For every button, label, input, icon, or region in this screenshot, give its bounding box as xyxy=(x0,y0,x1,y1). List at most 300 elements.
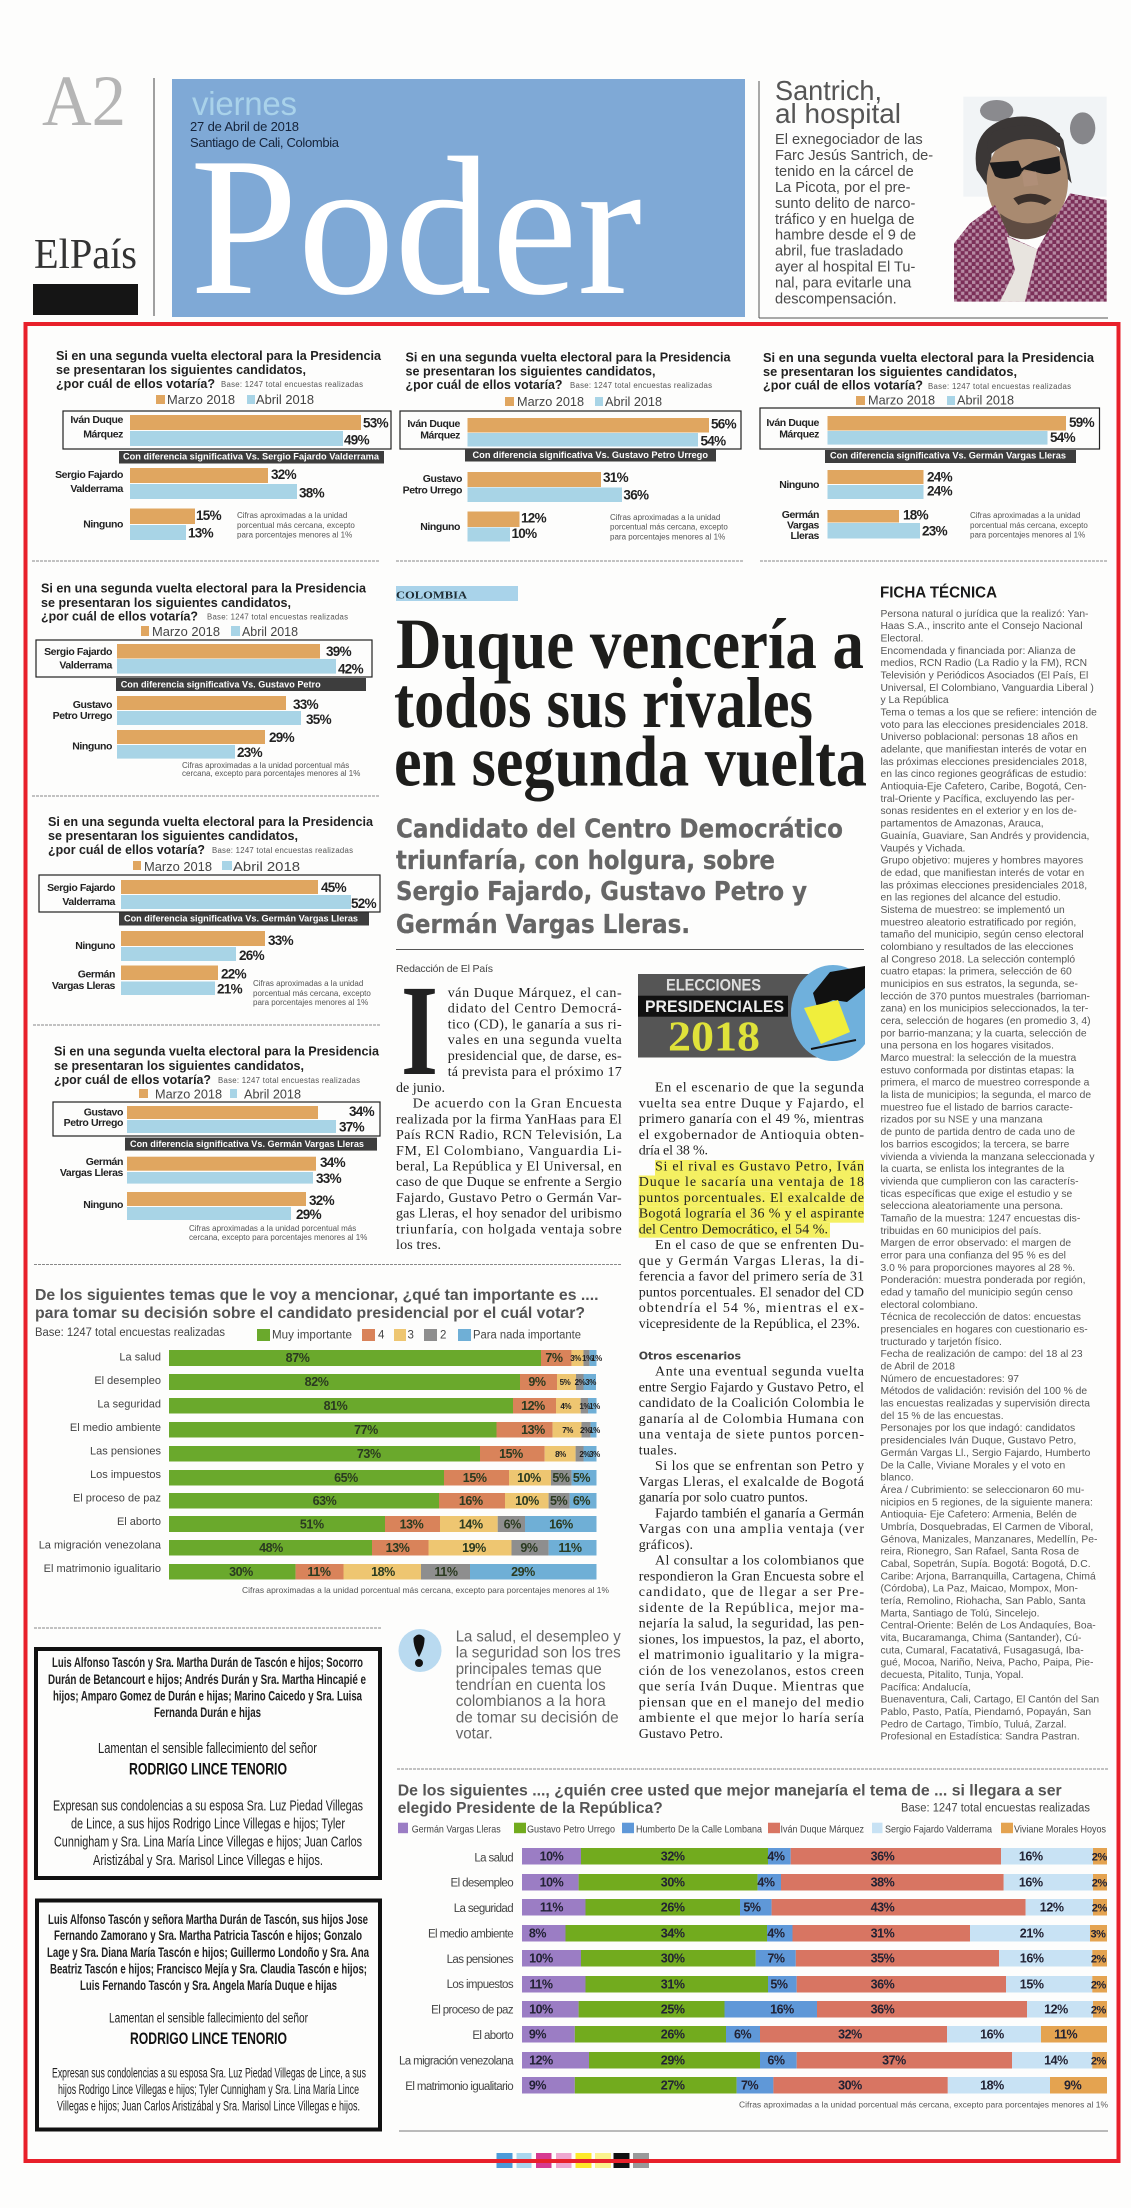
row: El aborto: 6% xyxy=(734,2028,752,2042)
sheet text: cuta, Cumaral, Facatativá, Fusagasugá, Iba- xyxy=(880,1645,1084,1656)
row: El medio ambiente xyxy=(428,1925,1107,1942)
sheet text: al Congreso 2018. La selección contempló xyxy=(880,954,1075,965)
chart title: Si en una segunda vuelta electoral para la Presidencia xyxy=(54,1044,380,1059)
sheet text: del 15 % de las encuestas. xyxy=(880,1411,1004,1422)
sheet text: Margen de error observado: el margen de xyxy=(880,1238,1071,1249)
bars: Ninguno: Ninguno xyxy=(83,1199,123,1211)
bars: Gustavo Petro Urrego: 37% xyxy=(339,1120,365,1135)
chart title: para tomar su decisión sobre el candidato presidencial por el cuál votar? xyxy=(35,1305,585,1322)
article column 2: el matrimonio igualitario y la migra- xyxy=(639,1648,864,1663)
bars: Ninguno: 24% xyxy=(927,469,953,484)
callout text: principales temas que xyxy=(456,1661,602,1678)
article column 2: Si el rival es Gustavo Petro, Iván xyxy=(655,1159,864,1174)
legend xyxy=(139,1087,301,1102)
notice condolences: de Lince, a sus hijos Rodrigo Lince Villegas e hijos; Tyler xyxy=(71,1817,345,1833)
row: Los impuestos: 15% xyxy=(1020,1978,1044,1992)
article text: beral, La República y El Universal, en xyxy=(396,1160,622,1174)
notice line: Lamentan el sensible fallecimiento del señor xyxy=(98,1741,317,1757)
bars: Ninguno: 23% xyxy=(237,745,263,760)
row: El desempleo: 5% xyxy=(560,1378,571,1387)
row: La seguridad: 1% xyxy=(579,1402,590,1411)
graphic label: ELECCIONES xyxy=(666,976,761,995)
row: El desempleo: 30% xyxy=(661,1876,685,1890)
row: El medio ambiente: 1% xyxy=(589,1426,600,1435)
legend: Abril 2018 xyxy=(242,624,298,639)
row: El matrimonio igualitario: El matrimonio igualitario xyxy=(405,2081,513,2093)
bars: Iván Duque Márquez: 56% xyxy=(711,416,737,432)
row: El matrimonio igualitario: El matrimonio igualitario xyxy=(44,1563,161,1575)
row: Las pensiones: 30% xyxy=(661,1952,685,1966)
legend: Abril 2018 xyxy=(256,392,314,407)
row: El proceso de paz: 5% xyxy=(550,1494,568,1508)
bars: Ninguno xyxy=(72,730,295,760)
chart title: se presentaran los siguientes candidatos, xyxy=(41,595,291,610)
article column 2: Si los que se enfrentan son Petro y xyxy=(655,1459,864,1474)
legend xyxy=(398,1823,1106,1836)
legend: Sergio Fajardo Valderrama xyxy=(885,1824,992,1836)
footnote: cercana, excepto para porcentajes menores al 1% xyxy=(189,1233,367,1242)
legend xyxy=(156,392,314,407)
row: El aborto: 6% xyxy=(504,1518,521,1532)
sheet text: Tamaño de la muestra: 1247 encuestas dis- xyxy=(880,1213,1080,1224)
base note: Base: 1247 total encuestas realizadas xyxy=(570,381,712,390)
article column 2: que y Germán Vargas Lleras, la di- xyxy=(639,1254,864,1269)
bars: Iván Duque Márquez: 59% xyxy=(1069,415,1095,430)
row: El aborto: 16% xyxy=(549,1518,573,1532)
row: El aborto: 13% xyxy=(400,1518,424,1532)
bars: Sergio Fajardo Valderrama: Sergio Fajardo xyxy=(47,882,115,894)
article text: vales en una segunda vuelta xyxy=(448,1033,622,1048)
brief text: La Picota, por el pre- xyxy=(775,180,911,196)
sheet text: las próximas elecciones presidenciales 2018, xyxy=(880,880,1087,891)
callout text: colombianos a la hora xyxy=(456,1693,606,1710)
row: El medio ambiente: 31% xyxy=(871,1926,895,1940)
bars: Ninguno: 24% xyxy=(927,484,953,499)
row: Las pensiones: 2% xyxy=(579,1450,590,1459)
article text: De acuerdo con la Gran Encuesta xyxy=(413,1097,622,1112)
legend: Marzo 2018 xyxy=(517,394,584,409)
bars: Sergio Fajardo Valderrama xyxy=(44,644,364,677)
sheet text: partamentos de Amazonas, Arauca, xyxy=(880,819,1044,830)
row: El matrimonio igualitario xyxy=(405,2077,1107,2094)
sheet text: adelante, que manifiestan interés de votar en xyxy=(880,745,1087,756)
article column 2: sidente de la República, mejor ma- xyxy=(639,1601,864,1616)
sheet text: Pedro de Cartago, Timbío, Tuluá, Zarzal. xyxy=(880,1719,1067,1730)
row: La migración venezolana: 12% xyxy=(529,2054,553,2068)
sheet text: (Córdoba), La Paz, Maicao, Mompox, Mon- xyxy=(880,1584,1078,1595)
bars: Iván Duque Márquez xyxy=(766,415,1095,445)
banner date: 27 de Abril de 2018 xyxy=(190,119,299,134)
banner place: Santiago de Cali, Colombia xyxy=(190,135,340,150)
legend: Gustavo Petro Urrego xyxy=(527,1824,615,1836)
legend: Marzo 2018 xyxy=(152,624,220,639)
bars: Iván Duque Márquez xyxy=(70,414,389,448)
article column 2: ganaría por solo cuatro puntos. xyxy=(639,1491,808,1506)
sheet text: los barrios escogidos; la tercera, se barre xyxy=(880,1139,1070,1150)
headline: en segunda vuelta xyxy=(394,722,867,802)
sheet text: muestreo aleatorio estratificado por región, xyxy=(880,917,1076,928)
sheet text: blanco. xyxy=(880,1473,914,1484)
headline: todos sus rivales xyxy=(394,663,813,743)
legend: Viviane Morales Hoyos xyxy=(1014,1824,1106,1836)
row: La salud: 3% xyxy=(570,1354,581,1363)
sheet text: municipios en sus estratos, la segunda, se- xyxy=(880,979,1078,990)
chart title: elegido Presidente de la República? xyxy=(398,1800,663,1817)
legend: 2 xyxy=(440,1330,446,1342)
row: Los impuestos: 65% xyxy=(334,1471,358,1485)
article column 2: Otros escenarios xyxy=(639,1350,741,1362)
bars: Gustavo Petro Urrego: Gustavo xyxy=(84,1106,123,1118)
brief text: tenido en la cárcel de xyxy=(775,164,914,180)
bars: Sergio Fajardo Valderrama: 45% xyxy=(321,880,347,895)
section tag: COLOMBIA: COLOMBIA xyxy=(396,590,467,602)
row: La migración venezolana: 14% xyxy=(1044,2054,1068,2068)
row: El matrimonio igualitario: 27% xyxy=(661,2078,685,2092)
row: Los impuestos: 5% xyxy=(573,1471,590,1485)
base note: Base: 1247 total encuestas realizadas xyxy=(901,1803,1090,1815)
bars: Ninguno xyxy=(779,469,953,499)
sheet text: Umbría, Dosquebradas, El Carmen de Viboral, xyxy=(880,1522,1093,1533)
row: La migración venezolana: 19% xyxy=(462,1541,486,1555)
bars: Gustavo Petro Urrego xyxy=(403,470,649,503)
row: Los impuestos: 36% xyxy=(871,1978,895,1992)
sheet text: tructurado y tarjetón físico. xyxy=(880,1337,1002,1348)
row: Las pensiones: 35% xyxy=(871,1952,895,1966)
row: La seguridad: 5% xyxy=(743,1900,761,1914)
row: El desempleo: El desempleo xyxy=(451,1878,513,1890)
row: La seguridad: 26% xyxy=(661,1900,685,1914)
row: El aborto xyxy=(117,1516,596,1532)
bars: Ninguno: 33% xyxy=(268,933,294,948)
sheet text: Área / Cubrimiento: se seleccionaron 60 mu- xyxy=(880,1483,1084,1496)
row: El proceso de paz: 16% xyxy=(459,1494,483,1508)
footnote: Cifras aproximadas a la unidad xyxy=(253,979,363,988)
bars: Gustavo Petro Urrego: 35% xyxy=(306,712,332,727)
chart title: ¿por cuál de ellos votaría? xyxy=(406,377,563,392)
sheet text: De la Calle, Viviane Morales y el voto en xyxy=(880,1460,1065,1471)
bars: Gustavo Petro Urrego: Petro Urrego xyxy=(403,484,462,496)
legend: Muy importante xyxy=(272,1330,352,1342)
row: Las pensiones xyxy=(90,1446,600,1462)
bars: Germán Vargas Lleras xyxy=(60,1155,346,1186)
sheet text: Antioquia-Eje Cafetero, Caribe, Bogotá, Cen- xyxy=(880,782,1087,793)
brief heading: Santrich, xyxy=(775,75,882,106)
bars: Ninguno: 29% xyxy=(296,1207,322,1222)
black block xyxy=(33,284,138,315)
row: El medio ambiente: 8% xyxy=(529,1926,546,1940)
row: La seguridad: 1% xyxy=(589,1402,600,1411)
technical sheet: Ficha Técnica xyxy=(880,582,1099,1743)
panel: poll Petro vs Vargas Lleras xyxy=(53,1044,380,1242)
row: La migración venezolana: La migración venezolana xyxy=(39,1540,162,1552)
row: La salud xyxy=(119,1350,602,1366)
notice condolences: hijos Rodrigo Lince Villegas e hijos; Tyler Cunnigham y Sra. Lina María Lince xyxy=(58,2082,359,2097)
bars: Iván Duque Márquez: Márquez xyxy=(779,428,819,440)
row: Las pensiones: 2% xyxy=(1091,1954,1107,1966)
sheet text: tral-Oriente y Pacífica, excluyendo las per- xyxy=(880,794,1075,805)
bars: Germán Vargas Lleras: Germán xyxy=(86,1156,123,1168)
bars: Ninguno xyxy=(75,931,294,963)
footnote: para porcentajes menores al 1% xyxy=(610,532,725,541)
legend: 4 xyxy=(378,1330,385,1342)
row: Los impuestos: 2% xyxy=(1091,1980,1107,1992)
base note: Base: 1247 total encuestas realizadas xyxy=(218,1076,360,1085)
article column 2: piensan que en el manejo del medio xyxy=(639,1696,864,1710)
row: Las pensiones xyxy=(447,1950,1107,1966)
footnote: para porcentajes menores al 1% xyxy=(970,530,1085,540)
article column 2: Duque le sacaría una ventaja de 18 xyxy=(639,1175,864,1190)
row: El proceso de paz: 12% xyxy=(1044,2002,1068,2016)
legend xyxy=(257,1329,581,1342)
row: Las pensiones: 16% xyxy=(1020,1952,1044,1966)
article column 2: ganaría al de Colombia Humana con xyxy=(639,1412,864,1427)
sheet text: tería, Remolino, Riohacha, San Pablo, Santa xyxy=(880,1596,1086,1607)
footnote: porcentual más cercana, excepto xyxy=(610,523,728,532)
bars: Ninguno: 12% xyxy=(521,510,547,526)
row: El desempleo xyxy=(94,1374,596,1390)
base note: Base: 1247 total encuestas realizadas xyxy=(928,382,1071,391)
chart title: se presentaran los siguientes candidatos, xyxy=(56,362,306,377)
notice names: Fernando Zamorano y Sra. Martha Patricia Tascón e hijos; Gonzalo xyxy=(54,1927,362,1943)
article column 2: En el escenario de que la segunda xyxy=(655,1081,865,1096)
notice names: Fernanda Durán e hijas xyxy=(154,1704,261,1720)
headline: Duque vencería a xyxy=(396,604,864,684)
bars: Germán Vargas Lleras: 21% xyxy=(217,982,243,997)
article text: didato del Centro Democrá- xyxy=(448,1002,622,1017)
bars: Sergio Fajardo Valderrama xyxy=(47,880,377,911)
sheet text: Ponderación: muestra ponderada por región, xyxy=(880,1275,1085,1286)
row: Los impuestos: 31% xyxy=(661,1978,685,1992)
chart title: ¿por cuál de ellos votaría? xyxy=(41,609,198,624)
row: El desempleo: 2% xyxy=(1092,1878,1107,1890)
article column 2: que sería Iván Duque. Mientras que xyxy=(639,1680,864,1695)
row: La salud: La salud xyxy=(119,1352,161,1364)
article column 2: primero ganaría con el 49 %, mientras xyxy=(639,1112,864,1127)
sheet heading: FICHA TÉCNICA xyxy=(880,582,997,602)
row: Las pensiones: 7% xyxy=(767,1952,785,1966)
sheet text: la cuarta, se enlista los integrantes de la xyxy=(880,1164,1065,1175)
sheet text: Universo poblacional: personas 18 años en xyxy=(880,732,1078,743)
sheet text: Cabal, Sopetrán, Supía. Bogotá: Bogotá, D.C. xyxy=(880,1559,1091,1570)
row: El medio ambiente xyxy=(70,1422,600,1438)
page number A2: A2 xyxy=(42,61,126,141)
legend: Iván Duque Márquez xyxy=(780,1824,864,1836)
chart title: se presentaran los siguientes candidatos, xyxy=(54,1058,304,1073)
row: Los impuestos: Los impuestos xyxy=(90,1469,161,1481)
row: El proceso de paz xyxy=(73,1493,596,1508)
row: La migración venezolana: 9% xyxy=(520,1541,538,1555)
row: La seguridad: La seguridad xyxy=(454,1903,513,1915)
sheet text: Vaupés y Vichada. xyxy=(880,843,965,854)
article text: de junio. xyxy=(396,1081,445,1096)
article column 2: En el caso de que se enfrenten Du- xyxy=(655,1238,864,1253)
legend: Abril 2018 xyxy=(233,859,300,874)
footnote: Cifras aproximadas a la unidad xyxy=(970,511,1080,520)
callout text: tendrían en cuenta los xyxy=(456,1677,606,1694)
row: El matrimonio igualitario: 18% xyxy=(371,1565,395,1579)
significance strip: Con diferencia significativa Vs. Sergio Fajardo Valderrama xyxy=(123,452,380,462)
notice names: Beatriz Tascón e hijos; Francisco Mejía y Sra. Claudia Tascón e hijos; xyxy=(50,1960,367,1976)
row: La migración venezolana: 29% xyxy=(661,2054,685,2068)
notice names: hijos; Amparo Gomez de Durán e hijas; Marino Caicedo y Sra. Luisa xyxy=(53,1687,362,1703)
row: Las pensiones: 15% xyxy=(499,1447,523,1461)
sheet text: rizados por su NSE y una manzana xyxy=(880,1115,1043,1126)
sheet text: las encuestas realizadas y supervisión directa xyxy=(880,1399,1090,1410)
row: El medio ambiente: 21% xyxy=(1020,1926,1044,1940)
bars: Ninguno xyxy=(83,1192,335,1222)
bars: Iván Duque Márquez: Márquez xyxy=(420,430,460,442)
legend: Marzo 2018 xyxy=(155,1087,222,1102)
sheet text: selecciona aleatoriamente una persona. xyxy=(880,1201,1063,1212)
bars: Ninguno: Ninguno xyxy=(72,740,112,752)
footnote: Cifras aproximadas a la unidad porcentual más xyxy=(189,1224,356,1233)
significance strip: Con diferencia significativa Vs. Germán Vargas Lleras xyxy=(830,450,1066,462)
section banner: Poder xyxy=(172,79,745,336)
row: La seguridad: 2% xyxy=(1092,1902,1107,1914)
row: El aborto: 9% xyxy=(529,2028,546,2042)
article column 2: Ante una eventual segunda vuelta xyxy=(655,1364,865,1380)
sheet text: reira, Rionegro, San Rafael, Santa Rosa de xyxy=(880,1547,1079,1558)
sheet text: Televisión y Periódicos Asociados (El País, El xyxy=(880,670,1088,682)
base note: Base: 1247 total encuestas realizadas xyxy=(212,846,353,855)
row: El proceso de paz xyxy=(431,2001,1107,2018)
row: El desempleo: 16% xyxy=(1019,1876,1043,1890)
row: La seguridad xyxy=(454,1899,1107,1916)
sheet text: cuatro etapas: la primera, selección de 60 xyxy=(880,967,1072,978)
sheet text: Marco muestral: la selección de la muestra xyxy=(880,1053,1076,1064)
panel: poll Fajardo vs Petro xyxy=(36,580,372,778)
bars: Gustavo Petro Urrego: 31% xyxy=(603,470,629,485)
notice condolences: Cunnigham y Sra. Lina María Lince Villegas e hijos; Juan Carlos xyxy=(54,1834,362,1850)
sheet text: Antioquia- Eje Cafetero: Armenia, Belén de xyxy=(880,1510,1077,1521)
row: La seguridad xyxy=(97,1398,600,1414)
legend: 3 xyxy=(408,1330,414,1342)
row: El proceso de paz: El proceso de paz xyxy=(431,2005,514,2017)
row: La migración venezolana: 37% xyxy=(882,2054,906,2068)
sheet text: en las cinco regiones geográficas de estudio: xyxy=(880,769,1087,780)
base note: Base: 1247 total encuestas realizadas xyxy=(207,612,348,621)
sheet text: gué, Mocoa, Nariño, Neiva, Pacho, Paipa, Pie- xyxy=(880,1658,1093,1669)
notice deceased name: RODRIGO LINCE TENORIO xyxy=(130,2029,287,2048)
article text: realizada por la firma YanHaas para El xyxy=(396,1112,622,1127)
sheet text: 3.0 % para proporciones mayores al 28 %. xyxy=(880,1263,1075,1274)
row: El desempleo: 38% xyxy=(871,1876,895,1890)
sheet text: sonas residentes en el exterior y en los de- xyxy=(880,806,1077,817)
bars: Ninguno: Ninguno xyxy=(420,521,460,533)
logo El País: ElPaís xyxy=(34,232,137,278)
sheet text: de edad, que manifiestan interés de votar en xyxy=(880,868,1085,879)
row: Las pensiones: 8% xyxy=(555,1450,566,1459)
brief text: El exnegociador de las xyxy=(775,132,923,148)
sheet text: Tema o temas a los que se refiere: intención de xyxy=(880,708,1097,719)
row: El desempleo: 3% xyxy=(585,1378,596,1387)
article text: tico (CD), le ganaría a sus ri- xyxy=(448,1017,622,1032)
significance strip: Con diferencia significativa Vs. Germán Vargas Lleras xyxy=(124,914,358,924)
sheet text: decuesta, Pitalito, Tunja, Yopal. xyxy=(880,1670,1024,1681)
sheet text: Universal, El Colombiano, Vanguardia Liberal ) xyxy=(880,683,1094,694)
sheet text: de Abril de 2018 xyxy=(880,1362,955,1373)
row: La seguridad: 4% xyxy=(560,1402,571,1411)
article column 2: candidato, que de llegar a ser Pre- xyxy=(639,1585,864,1600)
article text: presidencial que, de darse, es- xyxy=(448,1049,622,1064)
photo: portrait of Santrich xyxy=(954,97,1107,302)
row: El medio ambiente: 3% xyxy=(1090,1928,1106,1940)
row: El matrimonio igualitario: 29% xyxy=(511,1565,535,1579)
byline: Redacción de El País xyxy=(396,963,493,975)
sheet text: tribuidas en 60 municipios del país. xyxy=(880,1226,1041,1237)
article text: gas Lleras, el hoy senador del uribismo xyxy=(396,1207,622,1222)
bars: Iván Duque Márquez: Márquez xyxy=(83,428,123,440)
row: El proceso de paz: El proceso de paz xyxy=(73,1493,161,1505)
row: El medio ambiente: 13% xyxy=(521,1423,545,1437)
bars: Germán Vargas Lleras: Vargas Lleras xyxy=(52,980,116,992)
row: La salud: 10% xyxy=(540,1850,564,1864)
notice names: Luis Alfonso Tascón y Sra. Martha Durán de Tascón e hijos; Socorro xyxy=(52,1654,363,1670)
callout text: votar. xyxy=(456,1726,493,1743)
row: El desempleo: El desempleo xyxy=(94,1375,161,1387)
brief text: nal, para evitarle una xyxy=(775,276,912,292)
bars: Ninguno xyxy=(83,508,222,540)
sheet text: vivienda que cumplieron con las caracterís- xyxy=(880,1176,1079,1187)
banner day: viernes: viernes xyxy=(192,85,297,122)
row: Los impuestos: 15% xyxy=(463,1471,487,1485)
bars: Germán Vargas Lleras: Vargas Lleras xyxy=(60,1167,124,1179)
sheet text: las próximas elecciones presidenciales 2018, xyxy=(880,757,1087,768)
row: El aborto: 51% xyxy=(300,1518,324,1532)
row: La salud: 1% xyxy=(591,1354,602,1363)
sheet text: Germán Vargas Ll., Sergio Fajardo, Humberto xyxy=(880,1448,1091,1459)
row: El aborto: 16% xyxy=(980,2028,1004,2042)
row: Los impuestos xyxy=(90,1469,596,1486)
bars: Ninguno xyxy=(420,510,547,542)
article column 1 xyxy=(396,959,622,1253)
article column 2: Vargas con una amplia ventaja (ver xyxy=(639,1522,864,1537)
banner title: Poder xyxy=(190,117,642,336)
footnote: Cifras aproximadas a la unidad porcentual más cercana, excepto para porcentajes menores al 1% xyxy=(739,2099,1108,2109)
bars: Ninguno: Ninguno xyxy=(75,940,115,952)
bars: Gustavo Petro Urrego: 33% xyxy=(293,697,319,712)
bars: Gustavo Petro Urrego: 36% xyxy=(623,488,649,503)
sheet text: tamaño del municipio, según censo electoral xyxy=(880,930,1084,941)
sheet text: Génova, Manizales, Manzanares, Medellín, Pe- xyxy=(880,1534,1097,1545)
row: El desempleo: 2% xyxy=(575,1378,586,1387)
row: El aborto: El aborto xyxy=(472,2030,513,2042)
row: El medio ambiente: 2% xyxy=(580,1426,591,1435)
bars: Iván Duque Márquez: Iván Duque xyxy=(70,414,124,426)
brief: Santrich al hospital: al hospital xyxy=(775,98,901,129)
row: El matrimonio igualitario: 30% xyxy=(229,1565,253,1579)
bars: Sergio Fajardo Valderrama: Valderrama xyxy=(70,483,124,495)
article text: triunfaría, con holgada ventaja sobre xyxy=(396,1222,622,1237)
row: Los impuestos xyxy=(447,1976,1107,1992)
row: El aborto: 32% xyxy=(838,2028,862,2042)
legend xyxy=(141,624,298,639)
row: La salud: 7% xyxy=(545,1351,563,1365)
row: La salud: 2% xyxy=(1092,1852,1107,1864)
bars: Germán Vargas Lleras: 22% xyxy=(221,966,247,982)
row: El medio ambiente: 7% xyxy=(562,1426,573,1435)
bars: Gustavo Petro Urrego: 34% xyxy=(349,1104,375,1119)
chart title: Si en una segunda vuelta electoral para la Presidencia xyxy=(763,350,1095,365)
row: Los impuestos: 10% xyxy=(517,1471,541,1485)
row: El proceso de paz: 16% xyxy=(770,2002,794,2016)
chart title: De los siguientes temas que le voy a mencionar, ¿qué tan importante es .... xyxy=(35,1287,598,1304)
row: La seguridad: 12% xyxy=(1040,1900,1064,1914)
footnote: para porcentajes menores al 1% xyxy=(237,530,352,540)
sheet text: y La República xyxy=(880,695,949,706)
row: La migración venezolana: 11% xyxy=(558,1541,582,1555)
row: El proceso de paz: 10% xyxy=(529,2002,553,2016)
